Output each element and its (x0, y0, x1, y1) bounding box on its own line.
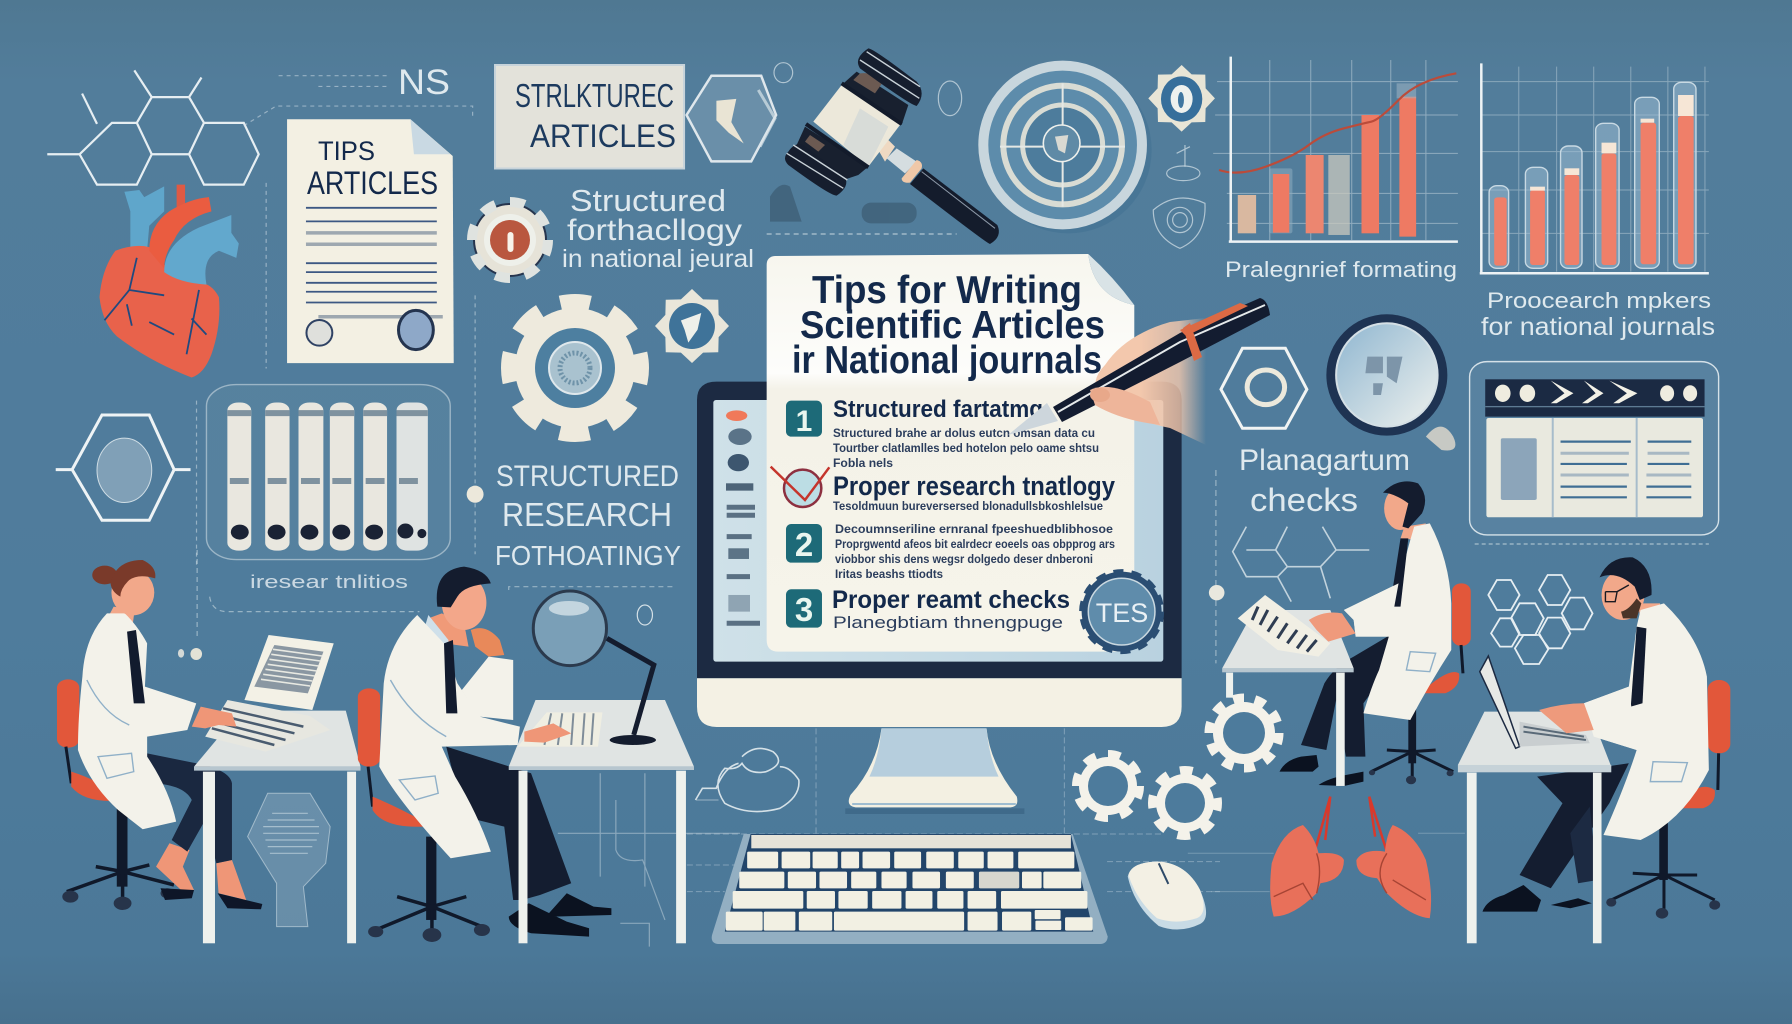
small dark sketches (770, 185, 917, 223)
chart: test-tube bars (1480, 63, 1709, 273)
label: chart caption left: Pralegnrief formating (1225, 257, 1457, 282)
label: Planagartum checks (1239, 444, 1410, 518)
label: chart caption right (1481, 288, 1715, 341)
desk (194, 711, 361, 943)
left upper column artwork (47, 65, 776, 569)
pen nib (1008, 403, 1058, 435)
monitor bezel (697, 382, 1182, 678)
checklist text: Tourtber clatlamlles bed hotelon pelo oame shtsu (833, 443, 1099, 455)
label: Structured forthacllogy: Structured (570, 183, 726, 218)
checklist text: Fobla nels (833, 458, 893, 470)
checklist text (832, 396, 1115, 632)
checklist text: Proprgwentd afeos bit ealrdecr eoeels oas obpprog ars (835, 539, 1115, 551)
central monitor with article sheet (697, 254, 1182, 727)
mouse (1128, 862, 1206, 930)
lungs (1270, 797, 1431, 918)
icon: hexagon badge (687, 76, 776, 161)
woman researcher (57, 560, 262, 910)
faint sketch icons (758, 63, 1205, 248)
small gear with orange centre (472, 202, 548, 278)
label: Structurec Articles: STRLKTUREC (515, 77, 674, 114)
icon: concentric target (983, 66, 1152, 233)
badge numeral 2: 2 (795, 526, 813, 563)
pen and hand (1008, 298, 1270, 445)
checklist text: Proper research tnatlogy (833, 471, 1115, 501)
seal badge (1082, 572, 1162, 652)
gavel and target group (758, 48, 1215, 248)
panel: video storyboard (1470, 362, 1719, 535)
label: Structured Research Fothoatingy: STRUCTURED (496, 460, 679, 493)
checklist text: Structured brahe ar dolus eutcn omsan data cu (833, 428, 1095, 440)
large gear (513, 306, 637, 430)
checklist text: Structured fartatmg (833, 396, 1043, 423)
title: ir National journals (792, 339, 1102, 382)
label: NS: NS (398, 63, 450, 102)
pen barrel (1053, 298, 1270, 422)
ghost schematic (558, 773, 740, 947)
label: Structured Research Fothoatingy (495, 460, 681, 571)
icon: star badge (1148, 65, 1215, 132)
checklist text: Planegbtiam thnengpuge (833, 613, 1063, 632)
label: Structured forthacllogy (562, 183, 754, 273)
finger (1090, 387, 1160, 425)
badge numeral 1: 1 (796, 405, 812, 438)
tiny icons (178, 605, 652, 660)
title: Tips for Writing (812, 269, 1082, 312)
panel: test tubes (206, 385, 450, 560)
icon: hexagon with capsule (56, 415, 191, 520)
label: chart caption right: Proocearch mpkers (1487, 288, 1711, 313)
connector dotted lines (197, 76, 475, 569)
monitor stand, keyboard and mouse (687, 728, 1220, 944)
keyboard (712, 834, 1108, 944)
monitor screen (713, 400, 1163, 662)
small white gear (1154, 772, 1216, 834)
left seated researchers (57, 550, 740, 947)
number badge 3 (786, 589, 822, 628)
label: Structured forthacllogy: forthacllogy (567, 214, 742, 247)
researcher at laptop with glasses (1458, 557, 1730, 943)
checklist text: Tesoldmuun bureversersed blonadullsbkoshlelsue (833, 501, 1103, 513)
top right charts and panels (1213, 57, 1719, 535)
label: Structurec Articles: ARTICLES (530, 118, 676, 154)
hexagon molecule (1233, 527, 1369, 602)
molecule hexagon network (47, 70, 259, 185)
chart: growth bars with trend line (1213, 57, 1458, 242)
icon: hexagon ring (1221, 348, 1307, 428)
title: Scientific Articles (800, 304, 1105, 347)
label: Tips Articles on document (307, 136, 438, 201)
monitor chin (697, 678, 1182, 727)
screen sidebar icons (726, 410, 760, 623)
desk-side translucent glass icon (248, 793, 330, 927)
label: research caption: iresear tnlitios (250, 572, 408, 592)
title (792, 269, 1105, 382)
male researcher with hand on chin (358, 567, 611, 942)
pen bands (1180, 303, 1248, 361)
label: Structured Research Fothoatingy: RESEARCH (502, 496, 672, 533)
checklist text: Proper reamt checks (832, 586, 1070, 614)
small white gear (1211, 700, 1277, 766)
icon: document TIPS ARTICLES (287, 119, 454, 363)
floor guide lines (1188, 833, 1465, 892)
star gear badge (655, 289, 729, 363)
decorative blob (1426, 427, 1455, 451)
hand (1095, 318, 1206, 445)
article sheet (767, 254, 1134, 652)
vertical guide with node (1209, 470, 1709, 663)
label: Structurec Articles (515, 77, 676, 154)
TES seal text: TES (1096, 598, 1148, 628)
right seated researchers (1188, 470, 1730, 943)
monitor stand (845, 728, 1024, 814)
node dots (467, 486, 484, 503)
label: Tips Articles on document: TIPS (318, 136, 375, 166)
checklist text: Decoumnseriline ernranal fpeeshuedblibhosoe (835, 524, 1113, 536)
label: Structured forthacllogy: in national jeural (562, 245, 754, 273)
panel: Structured Articles card (495, 65, 684, 169)
hexagon cluster (1488, 575, 1593, 664)
badge numeral 3: 3 (795, 591, 813, 628)
icon: magnifier lens (1326, 314, 1447, 436)
checklist text: Iritas beashs ttiodts (835, 569, 943, 581)
label: Planagartum checks: checks (1250, 482, 1358, 518)
number badge 2 (786, 524, 822, 563)
small white gear (1078, 756, 1138, 816)
label: Tips Articles on document: ARTICLES (307, 165, 438, 201)
open laptop with paper (192, 635, 334, 752)
researcher at desk with paper (1222, 481, 1471, 786)
label: Structured Research Fothoatingy: FOTHOATINGY (495, 540, 681, 571)
icon: gavel (785, 48, 999, 244)
cable tangle (695, 748, 799, 812)
check badge (771, 467, 829, 507)
label: Planagartum checks: Planagartum (1239, 444, 1410, 477)
checklist text: viobbor shis dens wegsr dolgedo deser dnberoni (835, 554, 1093, 566)
label: chart caption right: for national journals (1481, 313, 1715, 341)
desk with magnifier (509, 591, 694, 943)
icon: anatomical heart (100, 185, 239, 377)
guide lines (687, 728, 1220, 892)
number badge 1 (786, 401, 822, 437)
